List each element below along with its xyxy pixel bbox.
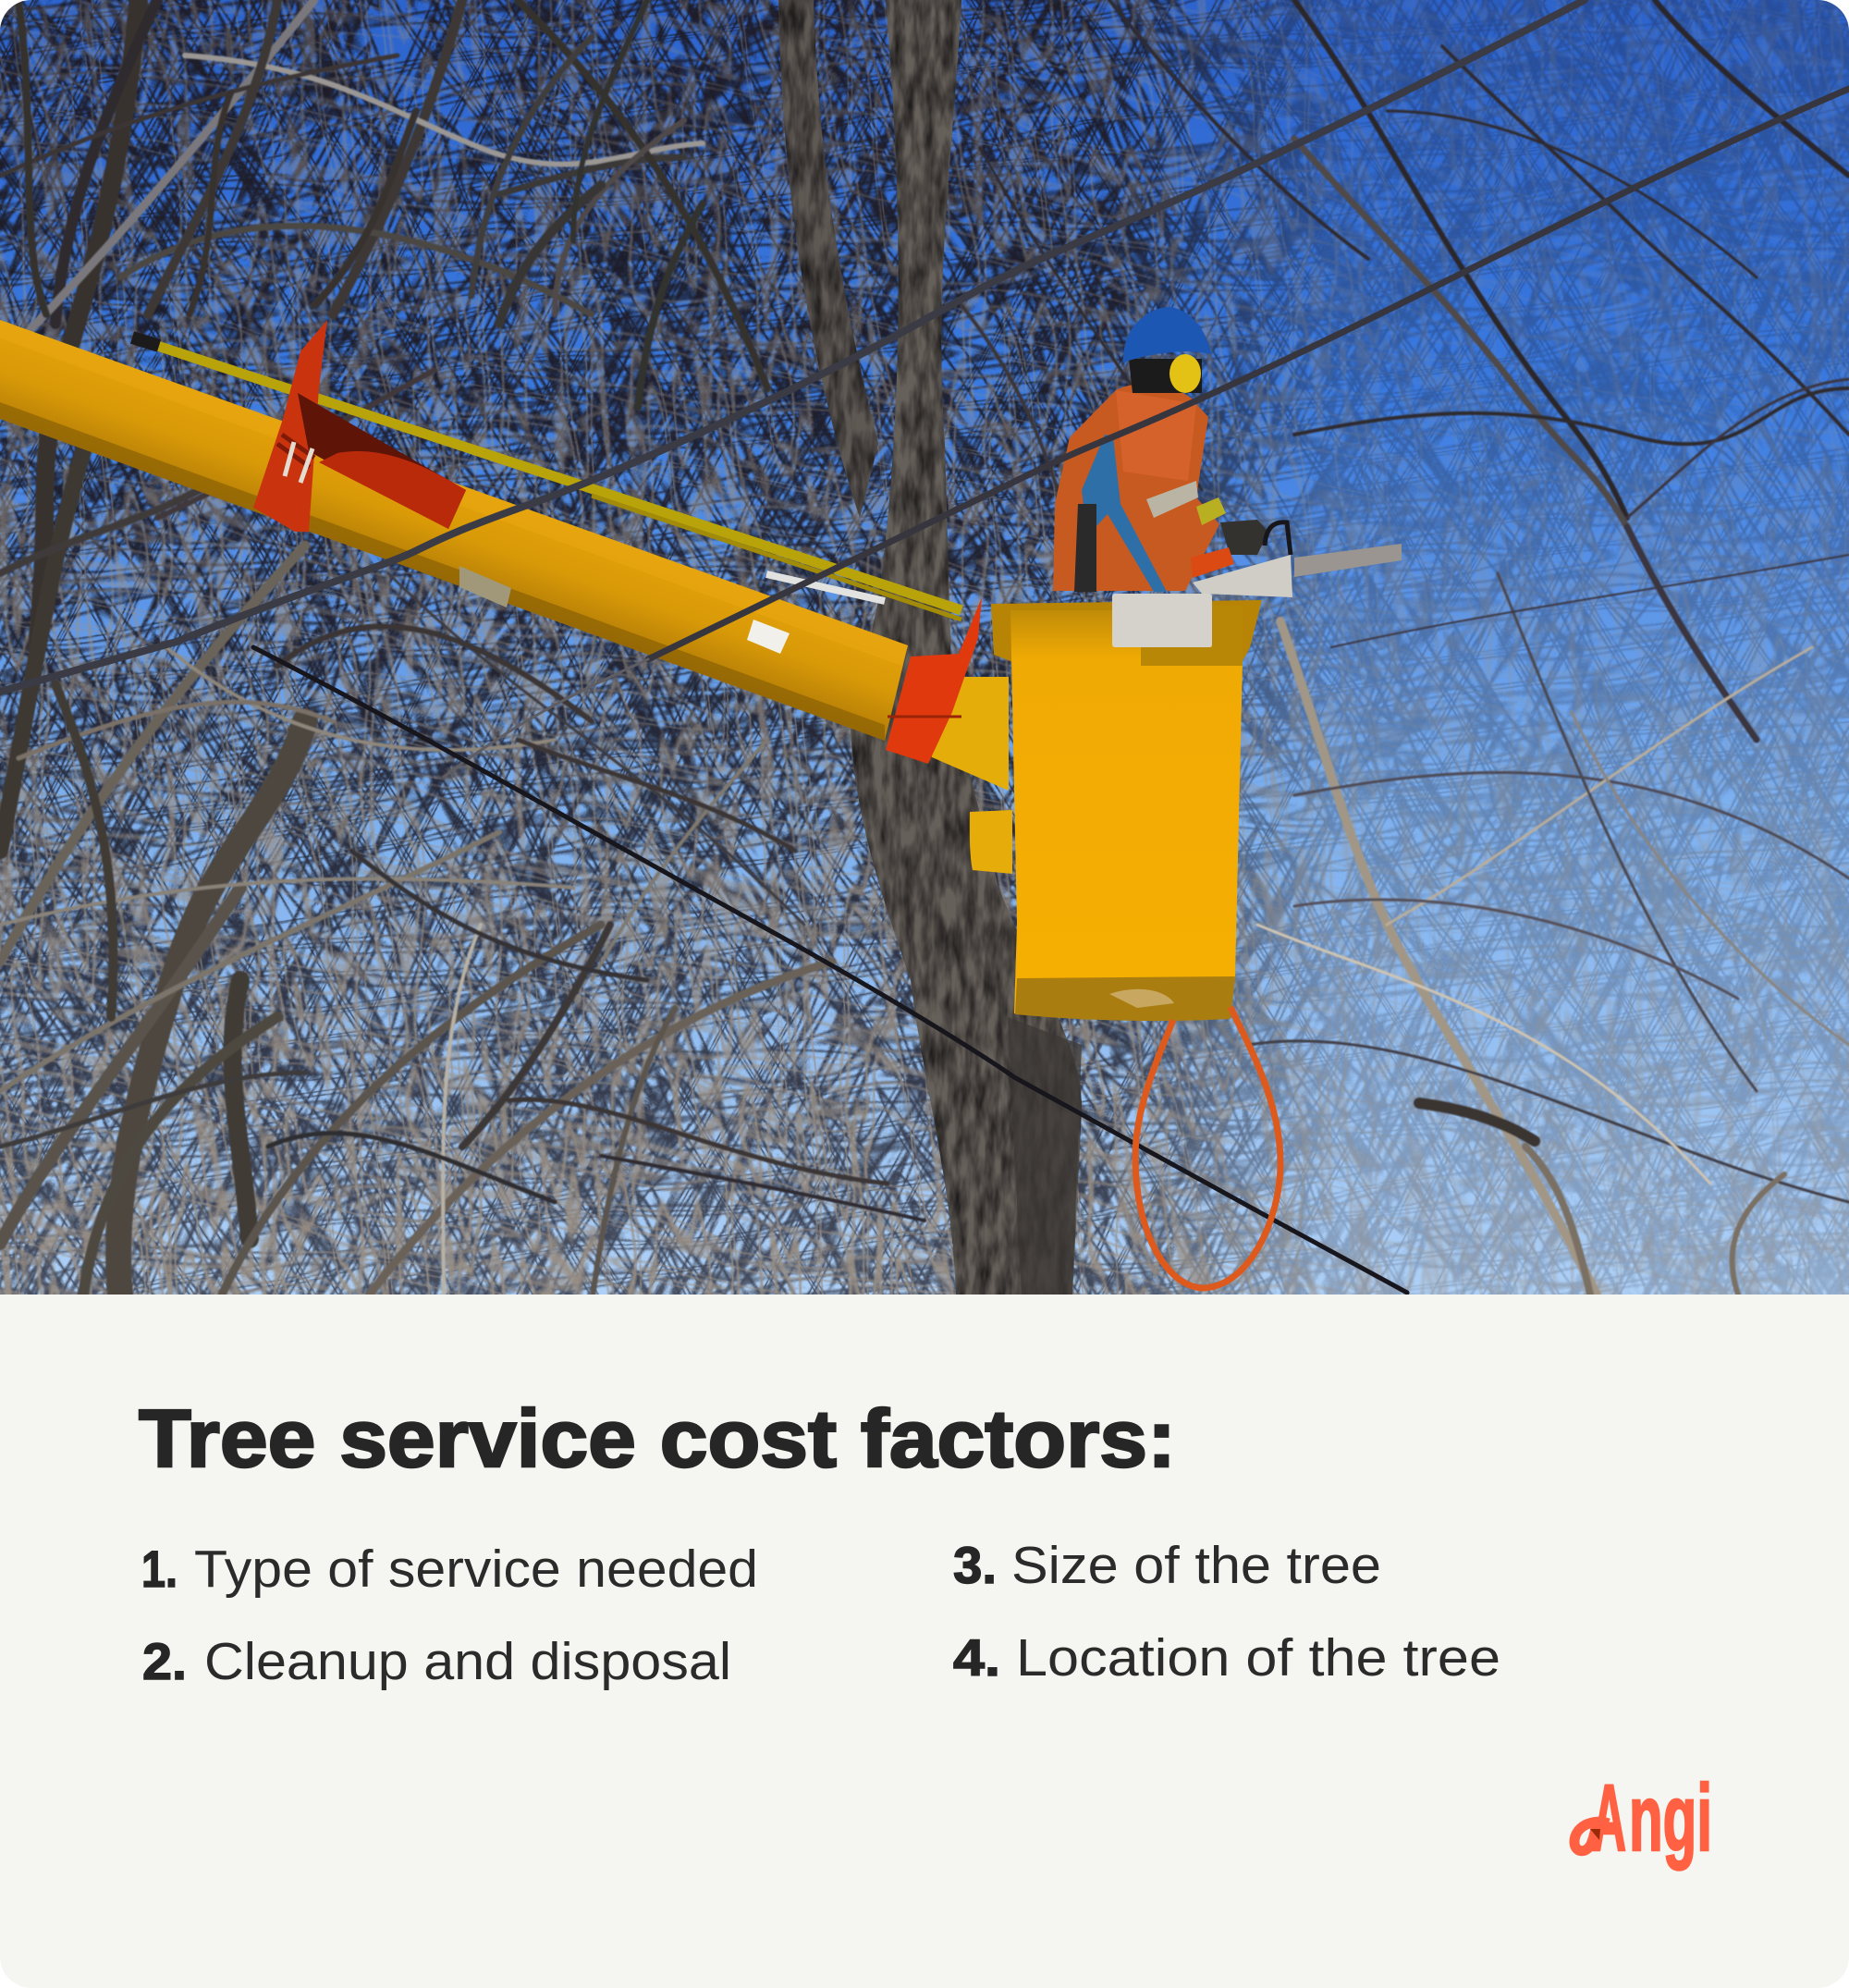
main tree trunk xyxy=(851,0,1082,1295)
list item 4: 4. xyxy=(953,1628,1000,1687)
fine twigs xyxy=(0,0,1849,1295)
list item 4: Location of the tree xyxy=(1016,1628,1500,1687)
head xyxy=(1129,359,1202,393)
bucket xyxy=(970,594,1262,1021)
Angi logo: A xyxy=(1592,1765,1626,1871)
side block xyxy=(970,810,1012,874)
photo: arborist in bucket truck among bare trees xyxy=(0,0,1849,1313)
boom arm xyxy=(0,320,908,741)
yellow pole xyxy=(132,337,961,620)
second trunk xyxy=(778,0,878,518)
glove xyxy=(1220,520,1268,555)
bucket bottom lip xyxy=(1015,976,1235,1021)
sky xyxy=(0,0,1849,1295)
red collar near bucket xyxy=(886,597,982,764)
Angi logo xyxy=(1574,1765,1712,1871)
bucket rim xyxy=(991,600,1262,661)
heavy branches, left side xyxy=(0,0,924,1313)
power cables xyxy=(0,0,1849,1293)
bucket body xyxy=(1010,610,1243,1017)
list item 2: Cleanup and disposal xyxy=(204,1632,731,1691)
list item 3: Size of the tree xyxy=(1011,1536,1381,1595)
list item 1: Type of service needed xyxy=(194,1540,758,1599)
harness xyxy=(1082,435,1167,592)
jacket xyxy=(1053,384,1219,591)
ear muff xyxy=(1169,354,1201,393)
card background xyxy=(0,1295,1849,1988)
boom to bucket bracket xyxy=(924,677,1009,791)
chainsaw xyxy=(1191,522,1402,597)
hard hat xyxy=(1123,307,1212,362)
reflective stripe xyxy=(1146,481,1198,518)
boom white sticker xyxy=(747,620,790,654)
list item 2: 2. xyxy=(142,1632,187,1690)
list item 1: 1. xyxy=(141,1540,178,1598)
heavy branches, right side xyxy=(961,0,1849,1295)
orange rope loop xyxy=(1135,1007,1280,1288)
red boom clamp xyxy=(253,320,466,532)
Angi logo: ngi xyxy=(1629,1765,1712,1871)
list item 3: 3. xyxy=(953,1536,997,1594)
boom label patch xyxy=(459,566,511,607)
worker xyxy=(1053,307,1268,592)
heading: Tree service cost factors: xyxy=(139,1393,1176,1484)
white pad on rim xyxy=(1112,594,1212,647)
